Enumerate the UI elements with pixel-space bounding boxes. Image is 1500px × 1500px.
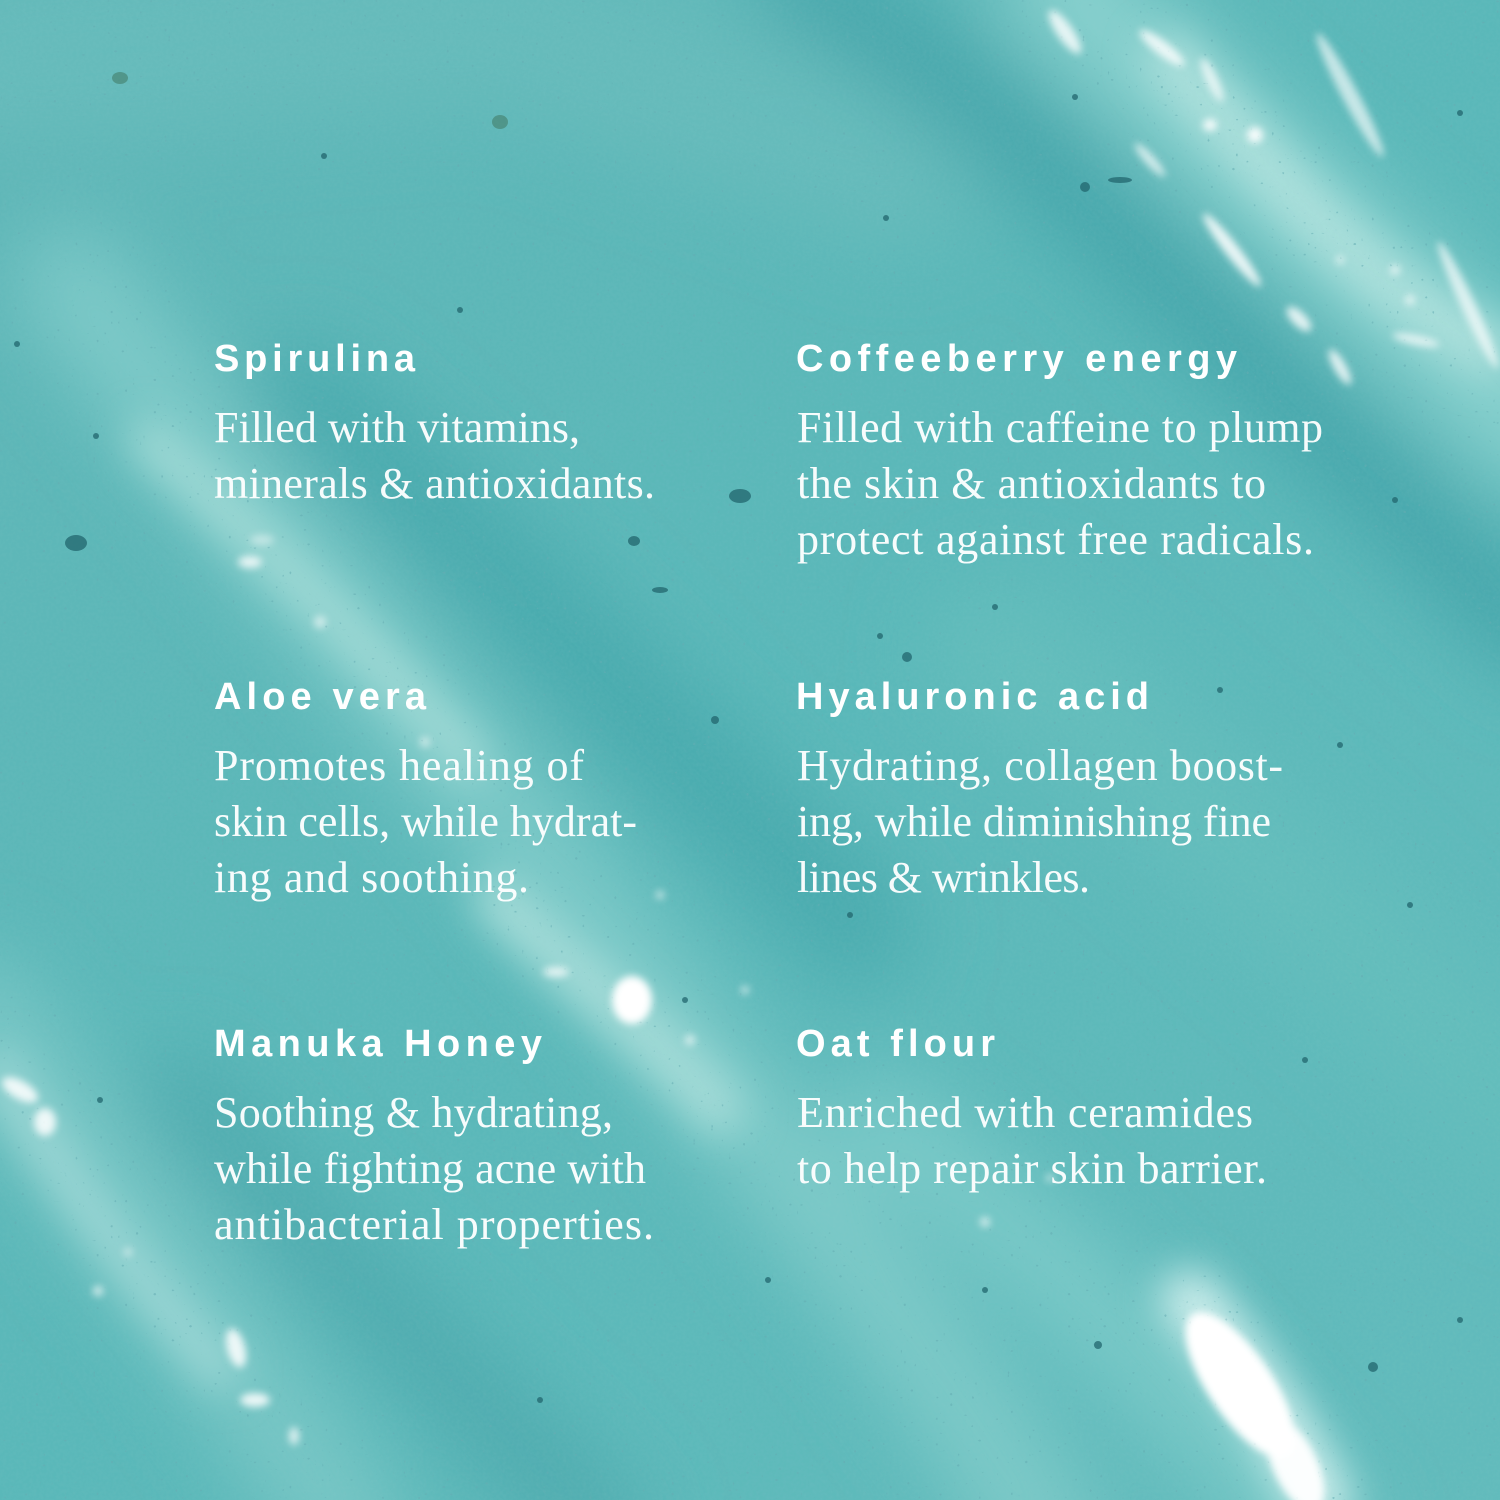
text: Spirulina description: minerals & antioxidants. [214, 459, 655, 508]
ingredient: Hyaluronic acid [796, 676, 1283, 902]
heading: Spirulina: Spirulina [214, 338, 416, 380]
text: Oat flour description: to help repair skin barrier. [797, 1144, 1267, 1193]
text: Aloe vera description: ing and soothing. [214, 853, 529, 902]
text: Hyaluronic acid description [797, 741, 1283, 902]
heading: Aloe vera: Aloe vera [214, 676, 427, 718]
text: Manuka Honey description [214, 1088, 654, 1249]
text: Coffeeberry description [797, 403, 1323, 564]
text: Hyaluronic acid description: lines & wrinkles. [797, 853, 1090, 902]
text: Coffeeberry description: protect against free radicals. [797, 515, 1314, 564]
heading: Manuka Honey: Manuka Honey [214, 1023, 542, 1065]
text: Manuka Honey description: Soothing & hydrating, [214, 1088, 613, 1137]
text: Coffeeberry description: the skin & antioxidants to [797, 459, 1266, 508]
ingredient: Aloe vera [214, 676, 637, 902]
text: Aloe vera description [214, 741, 637, 902]
text: Manuka Honey description: antibacterial properties. [214, 1200, 654, 1249]
text: Oat flour description [797, 1088, 1267, 1193]
heading: Oat flour: Oat flour [796, 1023, 995, 1065]
text: Hyaluronic acid description: Hydrating, collagen boost- [797, 741, 1283, 790]
heading: Hyaluronic acid: Hyaluronic acid [796, 676, 1149, 718]
ingredient: Spirulina [214, 338, 655, 508]
text: Oat flour description: Enriched with ceramides [797, 1088, 1253, 1137]
text: Spirulina description: Filled with vitamins, [214, 403, 580, 452]
text: Spirulina description [214, 403, 655, 508]
ingredient: Manuka Honey [214, 1023, 654, 1249]
text: Hyaluronic acid description: ing, while diminishing fine [797, 797, 1271, 846]
text: Coffeeberry description: Filled with caffeine to plump [797, 403, 1323, 452]
text: Aloe vera description: Promotes healing of [214, 741, 584, 790]
ingredient: Coffeeberry energy [796, 338, 1323, 564]
text: Manuka Honey description: while fighting acne with [214, 1144, 646, 1193]
ingredient: Oat flour [796, 1023, 1267, 1193]
text: Aloe vera description: skin cells, while hydrat- [214, 797, 637, 846]
heading: Coffeeberry energy: Coffeeberry energy [796, 338, 1237, 380]
